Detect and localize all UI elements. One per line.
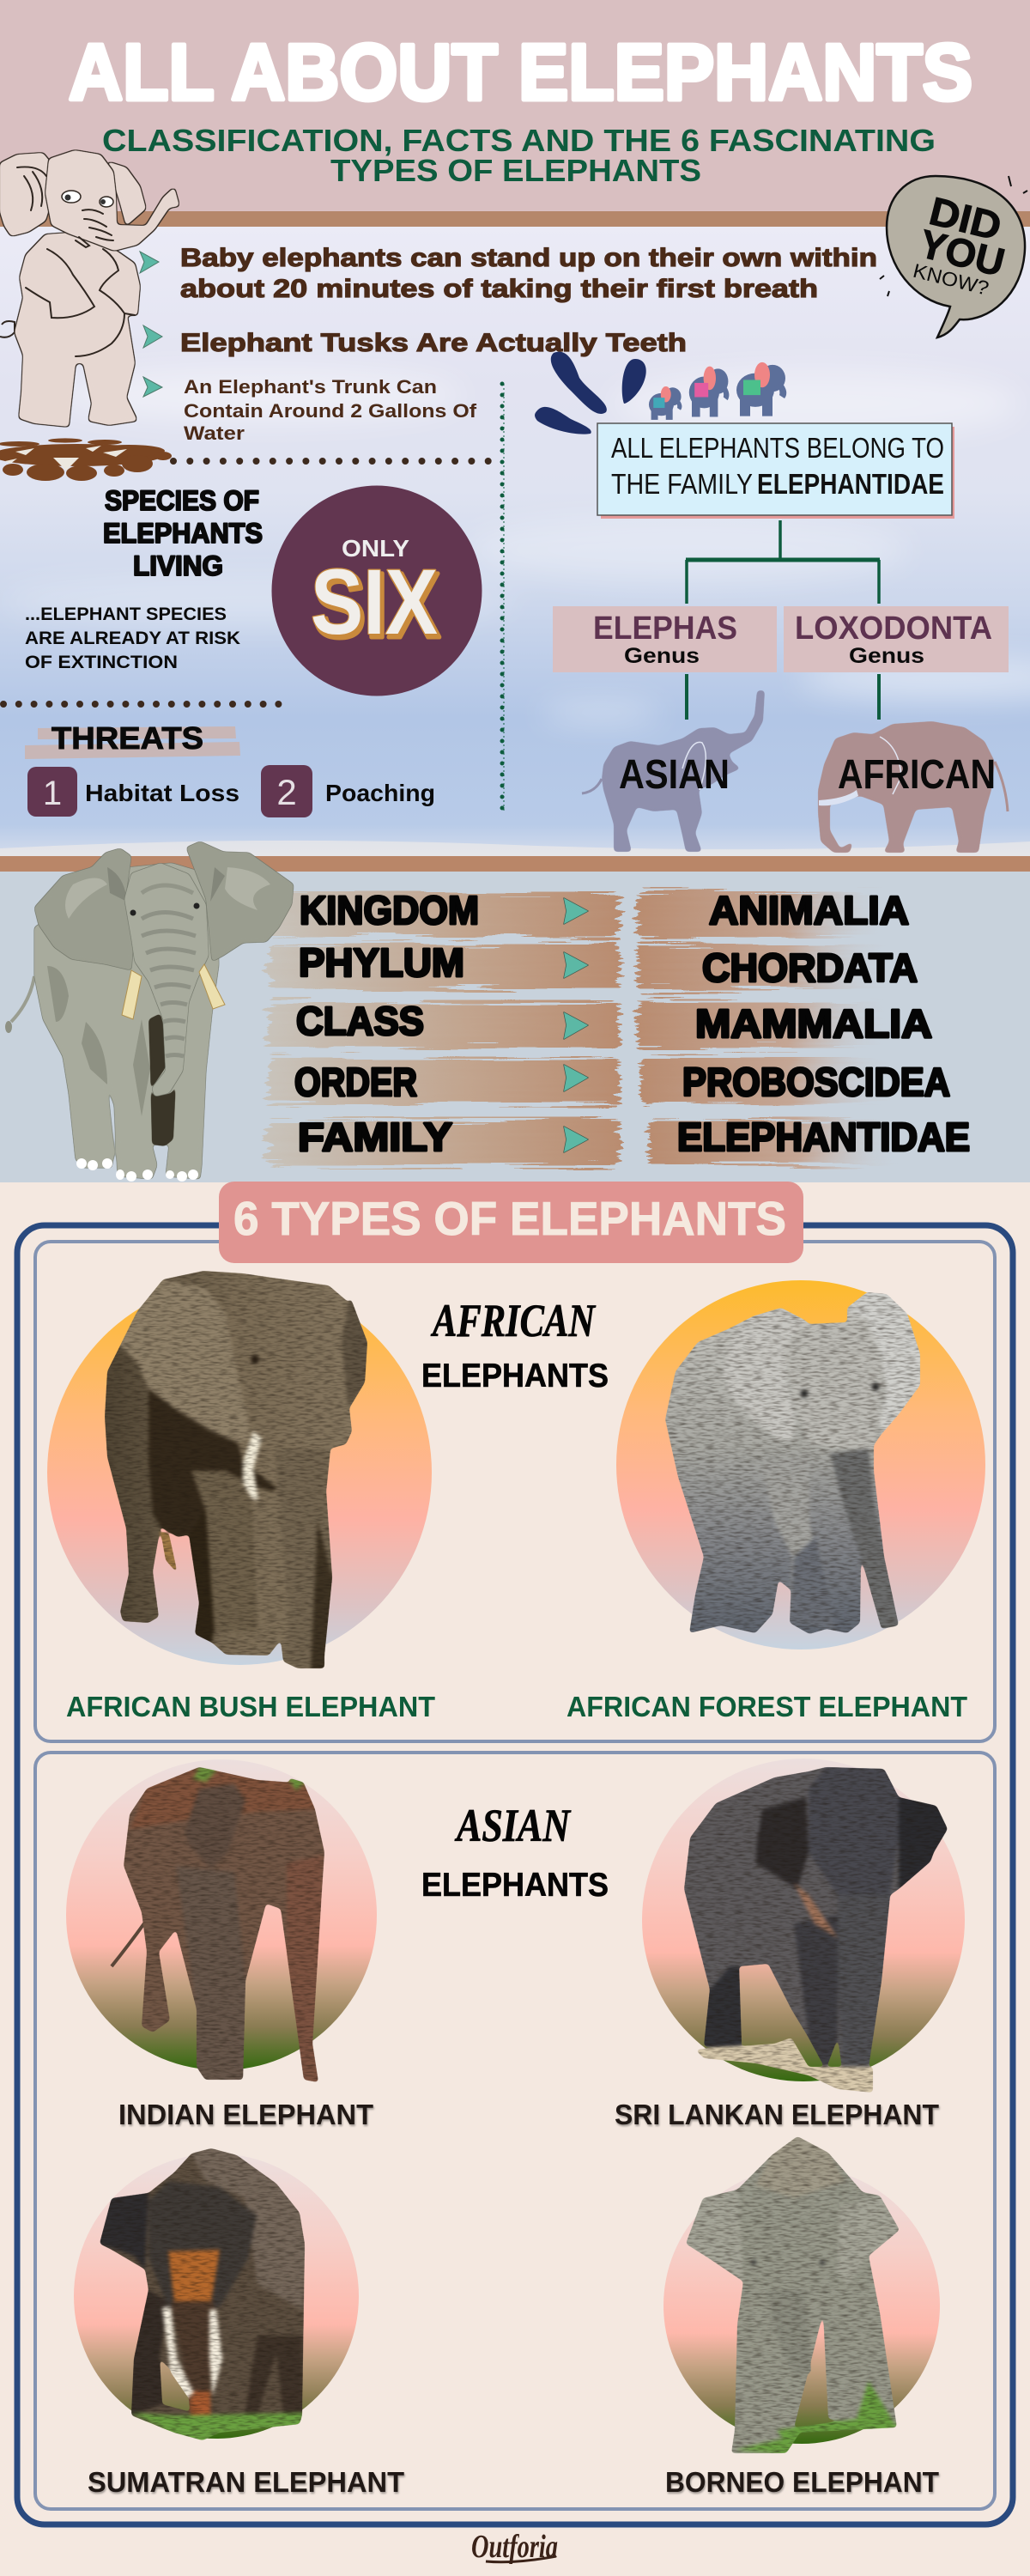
text: risk of extinction (25, 605, 240, 672)
photo: african forest elephant (616, 1280, 985, 1649)
silhouette: african elephant (818, 721, 1008, 853)
threat 1: habitat loss: 1 (43, 775, 62, 812)
photo: african bush elephant (47, 1271, 432, 1668)
genus: elephas: Genus (624, 644, 700, 668)
heading: threats: THREATS (52, 720, 203, 756)
row: family elephantidae (298, 1115, 970, 1159)
heading: threats (25, 720, 240, 759)
text: risk of extinction: OF EXTINCTION (25, 653, 178, 672)
threat 1: habitat loss: Habitat Loss (85, 780, 239, 806)
header band (0, 0, 1030, 211)
label: sri lankan elephant: SRI LANKAN ELEPHANT (615, 2099, 939, 2130)
row: class mammalia: CLASS (296, 999, 424, 1043)
circle: only six (271, 486, 482, 696)
panel: family elephantidae box: THE FAMILY (611, 468, 753, 500)
row: order proboscidea: PROBOSCIDEA (682, 1060, 950, 1104)
genus: loxodonta: LOXODONTA (795, 611, 992, 647)
brush stroke bars (268, 892, 898, 1165)
photo: sri lankan elephant (642, 1759, 965, 2093)
logo: outforia: Outforia (471, 2529, 558, 2565)
fact: tusks: Elephant Tusks Are Actually Teeth (180, 329, 687, 357)
row: phylum chordata: PHYLUM (299, 940, 464, 985)
row: family elephantidae: FAMILY (298, 1115, 452, 1159)
panel: african elephants frame (35, 1242, 995, 1741)
heading: asian elephants (421, 1800, 609, 1904)
fact: baby elephants (180, 244, 877, 303)
genus: loxodonta (784, 606, 1009, 672)
background: sky section (0, 227, 1030, 856)
photo: indian elephant (66, 1759, 377, 2082)
panel: outer frame (17, 1225, 1013, 2524)
panel: classification background (0, 872, 1030, 1182)
chart: genus tree connectors (686, 520, 880, 720)
icon: grey african elephant illustration (5, 841, 294, 1182)
icon: arrow 3 (143, 377, 162, 397)
subtitle: TYPES OF ELEPHANTS (330, 153, 701, 188)
threat 1: habitat loss (27, 767, 239, 817)
panel: family elephantidae box: ELEPHANTIDAE (757, 468, 944, 500)
heading banner: 6 types of elephants (219, 1182, 803, 1263)
row: order proboscidea: ORDER (294, 1060, 417, 1104)
icon: blue splash (535, 352, 646, 434)
label: indian elephant: INDIAN ELEPHANT (118, 2099, 373, 2130)
row: phylum chordata: CHORDATA (702, 945, 918, 990)
fact: trunk: Water (184, 422, 245, 444)
circle: only six: SIX (311, 550, 438, 653)
fact: trunk: An Elephant's Trunk Can (184, 376, 437, 398)
text: risk of extinction: ...ELEPHANT SPECIES (25, 605, 227, 624)
row: kingdom animalia: ANIMALIA (709, 888, 909, 933)
heading: species living: SPECIES OF (105, 485, 259, 516)
threat 2: poaching (261, 765, 435, 817)
fact: baby elephants: about 20 minutes of taking their first breath (180, 275, 818, 303)
heading: african elephants (421, 1295, 609, 1394)
row: family elephantidae: ELEPHANTIDAE (677, 1115, 970, 1159)
threat 2: poaching: Poaching (325, 780, 435, 806)
circle: only six: SIX (313, 553, 440, 657)
subtitle: CLASSIFICATION, FACTS AND THE 6 FASCINATING (102, 123, 936, 158)
threat 2: poaching: 2 (276, 772, 297, 812)
row: order proboscidea (294, 1060, 950, 1104)
silhouette: african elephant: AFRICAN (838, 752, 996, 798)
icon: arrow 2 (143, 325, 162, 348)
fact: trunk: Contain Around 2 Gallons Of (184, 400, 477, 422)
label: borneo elephant: BORNEO ELEPHANT (665, 2466, 939, 2498)
silhouette: asian elephant: ASIAN (619, 752, 730, 798)
heading: species living: LIVING (133, 550, 223, 581)
heading: asian elephants: ASIAN (455, 1800, 572, 1851)
icon: three small elephants (649, 362, 786, 420)
icon: baby cartoon elephant (0, 150, 179, 427)
brown divider bar (0, 856, 1030, 872)
brown divider bar (0, 211, 1030, 227)
icon: mud pile (0, 438, 172, 481)
panel: asian elephants frame (35, 1753, 995, 2509)
facts list (140, 244, 877, 444)
label: african bush elephant: AFRICAN BUSH ELEPHANT (66, 1691, 435, 1722)
panel: family elephantidae box (597, 423, 954, 519)
label: sumatran elephant: SUMATRAN ELEPHANT (88, 2466, 404, 2498)
callout: did you know bubble (880, 176, 1027, 337)
circle: only six: ONLY (342, 535, 409, 562)
genus: loxodonta: Genus (849, 644, 924, 668)
photo: sumatran elephant (74, 2148, 359, 2440)
panel: family elephantidae box: ALL ELEPHANTS BELONG TO (611, 432, 944, 464)
callout: did you know bubble: KNOW? (911, 259, 991, 300)
fact: trunk (184, 376, 477, 444)
callout: did you know bubble: YOU (915, 221, 1009, 285)
row: class mammalia (296, 999, 932, 1046)
heading: asian elephants: ELEPHANTS (421, 1867, 609, 1904)
panel: six types background (0, 1182, 1030, 2576)
photo: borneo elephant (663, 2136, 940, 2453)
heading: african elephants: AFRICAN (431, 1295, 597, 1346)
heading banner: 6 types of elephants: 6 TYPES OF ELEPHANTS (233, 1192, 786, 1245)
decorative dotted dividers (173, 458, 491, 465)
heading: african elephants: ELEPHANTS (421, 1358, 609, 1394)
fact: baby elephants: Baby elephants can stand up on their own within (180, 244, 877, 272)
heading: species living (103, 485, 263, 581)
genus: elephas: ELEPHAS (593, 611, 737, 647)
icon: arrow 1 (140, 252, 159, 273)
text: risk of extinction: ARE ALREADY AT RISK (25, 629, 240, 648)
row: kingdom animalia (300, 888, 909, 933)
label: african forest elephant: AFRICAN FOREST ELEPHANT (566, 1691, 967, 1722)
row: kingdom animalia: KINGDOM (300, 888, 479, 933)
row: class mammalia: MAMMALIA (695, 1001, 932, 1046)
heading: species living: ELEPHANTS (103, 518, 263, 549)
silhouette: asian elephant (582, 690, 765, 852)
row: phylum chordata (299, 940, 918, 990)
callout: did you know bubble: DID (925, 188, 1006, 249)
subtitle (102, 123, 936, 188)
genus: elephas (553, 606, 777, 672)
title: ALL ABOUT ELEPHANTS (69, 27, 972, 117)
classification rows (294, 888, 970, 1159)
